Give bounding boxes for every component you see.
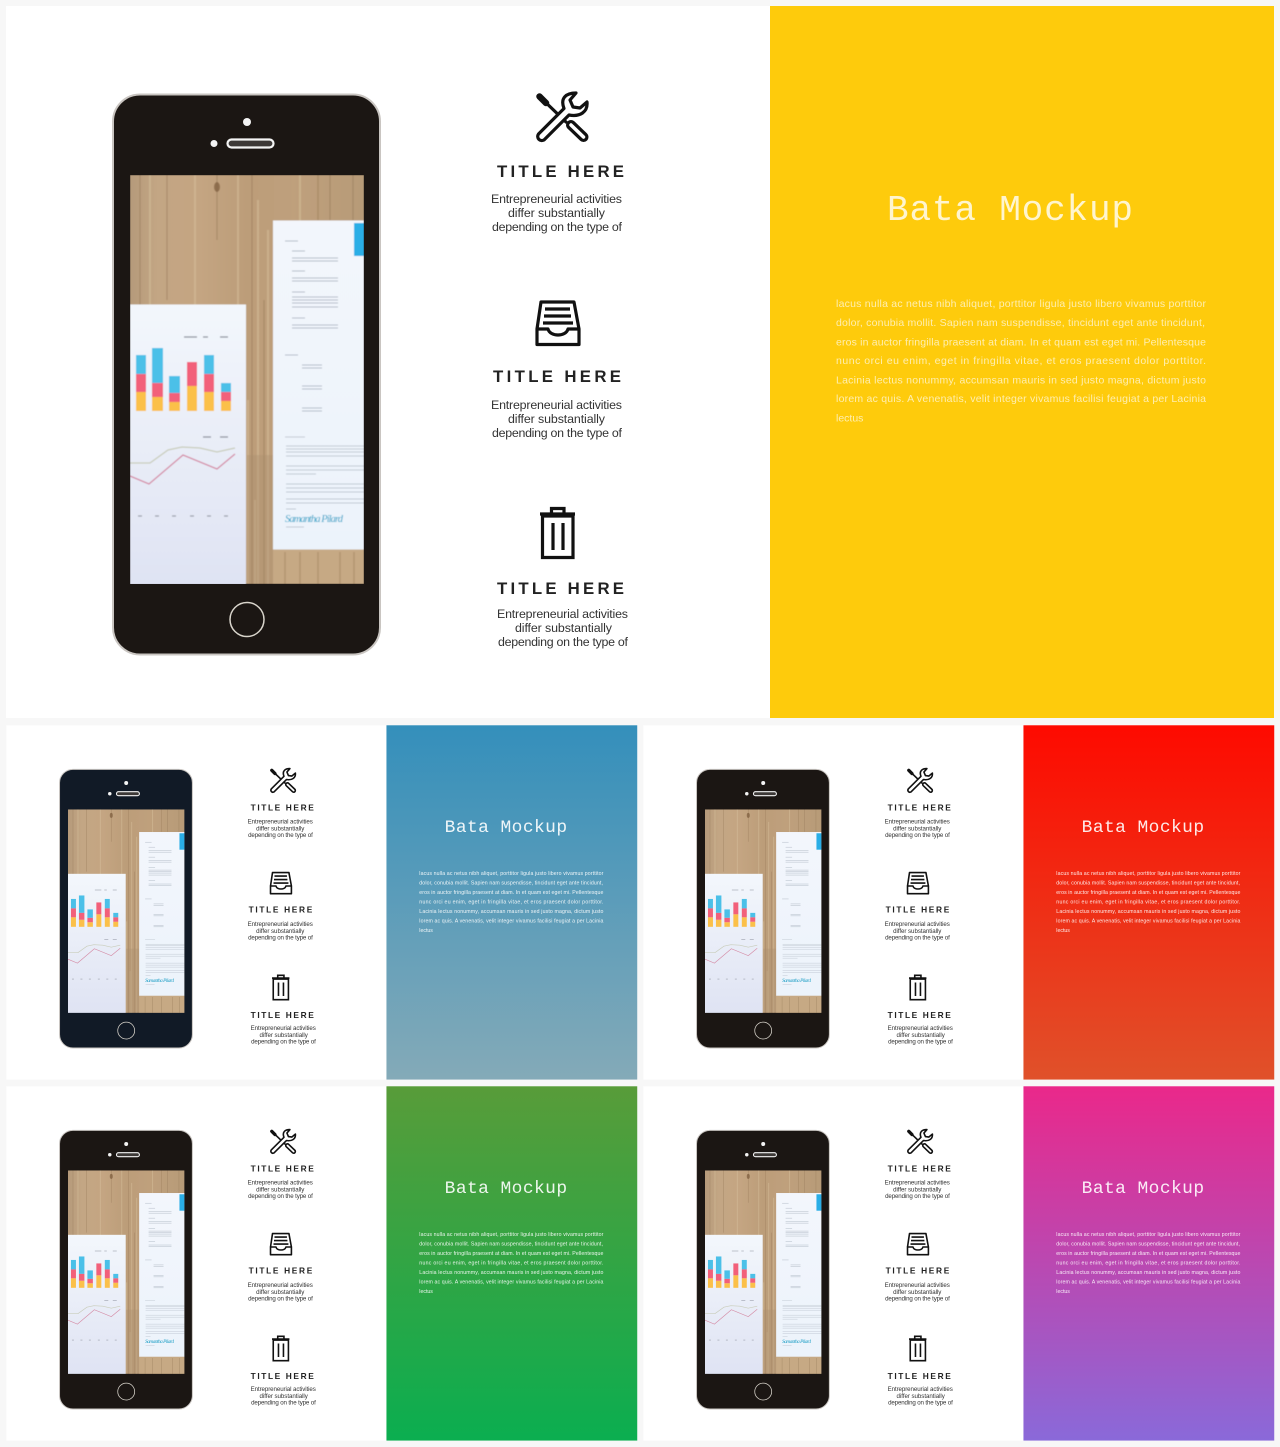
slide: pink mockup (643, 1086, 1274, 1441)
feature text 3: Entrepreneurial activities (888, 1025, 953, 1032)
feature text 3: differ substantially (897, 1393, 946, 1400)
panel body text: eros in auctor fringilla praesent at diam. In et quam est eget mi. Pellentesque (419, 1251, 603, 1257)
icon: tray (537, 302, 579, 344)
panel body text: lectus (1056, 928, 1070, 934)
feature title 3: TITLE HERE (888, 1010, 951, 1020)
feature text 2: Entrepreneurial activities (491, 398, 622, 412)
phone mockup (60, 1130, 192, 1409)
feature text 1: differ substantially (508, 206, 606, 220)
panel heading: Bata Mockup (445, 1179, 567, 1199)
panel body text: lorem ac quis. A venenatis, velit integer vivamus facilisi feugiat a per Lacinia (1056, 918, 1240, 924)
feature text 2: depending on the type of (248, 1296, 313, 1303)
feature title 1: TITLE HERE (888, 1163, 951, 1173)
feature text 2: differ substantially (508, 412, 606, 426)
feature text 1: differ substantially (893, 1186, 942, 1193)
panel body text: lectus (419, 1289, 433, 1295)
feature title 2: TITLE HERE (249, 1265, 313, 1275)
panel body text: Lacinia lectus nonummy, accumsan mauris in sed justo magna, dictum justo (1056, 909, 1240, 915)
icon: tray (271, 873, 291, 894)
icon: tray (908, 1234, 928, 1255)
feature text 2: differ substantially (893, 1289, 942, 1296)
feature text 2: differ substantially (256, 1289, 305, 1296)
feature text 3: differ substantially (260, 1393, 309, 1400)
panel body text: nunc orci eu enim, eget in fringilla vitae, et eros praesent dolor porttitor. (1056, 1260, 1240, 1266)
icon: tools (908, 1130, 932, 1153)
feature text 1: depending on the type of (248, 1193, 313, 1200)
phone mockup (697, 769, 829, 1048)
feature text 2: depending on the type of (885, 935, 950, 942)
panel body text: dolor, conubia mollit. Sapien nam suspendisse, tincidunt eget ante tincidunt, (836, 317, 1205, 329)
feature title 3: TITLE HERE (888, 1371, 951, 1381)
feature text 1: depending on the type of (492, 220, 623, 234)
feature text 1: depending on the type of (885, 1193, 950, 1200)
panel body text: eros in auctor fringilla praesent at diam. In et quam est eget mi. Pellentesque (419, 890, 603, 896)
panel body text: nunc orci eu enim, eget in fringilla vitae, et eros praesent dolor porttitor. (1056, 899, 1240, 905)
panel body text: nunc orci eu enim, eget in fringilla vitae, et eros praesent dolor porttitor. (419, 1260, 603, 1266)
slide background (6, 725, 637, 1080)
panel body text: dolor, conubia mollit. Sapien nam suspendisse, tincidunt eget ante tincidunt, (1056, 1242, 1240, 1248)
feature title 1: TITLE HERE (251, 1163, 314, 1173)
feature text 1: differ substantially (256, 825, 305, 832)
colour panel (386, 725, 637, 1080)
panel body text: lacus nulla ac netus nibh aliquet, porttitor ligula justo libero vivamus porttitor (419, 1232, 604, 1238)
feature title 2: TITLE HERE (886, 1265, 950, 1275)
slide background (6, 6, 1274, 718)
feature text 1: Entrepreneurial activities (248, 818, 313, 825)
feature text 3: depending on the type of (888, 1400, 953, 1407)
feature text 1: differ substantially (256, 1186, 305, 1193)
panel body text: lectus (419, 928, 433, 934)
feature text 1: differ substantially (893, 825, 942, 832)
panel body text: Lacinia lectus nonummy, accumsan mauris in sed justo magna, dictum justo (419, 1270, 603, 1276)
colour panel (1023, 725, 1274, 1080)
icon: tray (271, 1234, 291, 1255)
feature title 3: TITLE HERE (251, 1371, 314, 1381)
feature text 3: depending on the type of (251, 1039, 316, 1046)
feature text 3: Entrepreneurial activities (497, 607, 628, 621)
feature text 2: differ substantially (893, 928, 942, 935)
feature text 1: depending on the type of (248, 832, 313, 839)
icon: trash (909, 1336, 926, 1361)
feature text 2: differ substantially (256, 928, 305, 935)
panel heading: Bata Mockup (445, 818, 567, 838)
panel body text: lorem ac quis. A venenatis, velit integer vivamus facilisi feugiat a per Lacinia (836, 393, 1206, 405)
panel body text: Lacinia lectus nonummy, accumsan mauris in sed justo magna, dictum justo (1056, 1270, 1240, 1276)
feature text 1: Entrepreneurial activities (248, 1179, 313, 1186)
slide background (643, 725, 1274, 1080)
feature text 3: differ substantially (515, 621, 613, 635)
panel body text: lectus (836, 412, 863, 424)
icon: tray (908, 873, 928, 894)
panel body text: lacus nulla ac netus nibh aliquet, porttitor ligula justo libero vivamus porttitor (1056, 1232, 1241, 1238)
feature text 3: Entrepreneurial activities (251, 1386, 316, 1393)
panel body text: nunc orci eu enim, eget in fringilla vitae, et eros praesent dolor porttitor. (836, 355, 1206, 367)
colour panel (1023, 1086, 1274, 1441)
feature text 2: Entrepreneurial activities (248, 921, 313, 928)
panel body text: lacus nulla ac netus nibh aliquet, porttitor ligula justo libero vivamus porttitor (1056, 871, 1241, 877)
icon: tools (908, 769, 932, 792)
panel body text: dolor, conubia mollit. Sapien nam suspendisse, tincidunt eget ante tincidunt, (1056, 881, 1240, 887)
panel heading: Bata Mockup (887, 190, 1133, 231)
feature text 2: Entrepreneurial activities (885, 1282, 950, 1289)
feature title 2: TITLE HERE (886, 904, 950, 914)
feature text 1: Entrepreneurial activities (885, 1179, 950, 1186)
feature title 1: TITLE HERE (251, 802, 314, 812)
feature text 2: Entrepreneurial activities (248, 1282, 313, 1289)
panel body text: lorem ac quis. A venenatis, velit integer vivamus facilisi feugiat a per Lacinia (419, 1279, 603, 1285)
feature text 3: Entrepreneurial activities (251, 1025, 316, 1032)
feature text 2: depending on the type of (885, 1296, 950, 1303)
panel body text: Lacinia lectus nonummy, accumsan mauris in sed justo magna, dictum justo (419, 909, 603, 915)
panel body text: lorem ac quis. A venenatis, velit integer vivamus facilisi feugiat a per Lacinia (419, 918, 603, 924)
panel body text: dolor, conubia mollit. Sapien nam suspendisse, tincidunt eget ante tincidunt, (419, 1242, 603, 1248)
slide: blue mockup (6, 725, 637, 1080)
feature text 3: depending on the type of (498, 635, 629, 649)
slide background (6, 1086, 637, 1441)
icon: trash (272, 975, 289, 1000)
panel body text: Lacinia lectus nonummy, accumsan mauris in sed justo magna, dictum justo (836, 374, 1206, 386)
feature title 3: TITLE HERE (251, 1010, 314, 1020)
feature title 1: TITLE HERE (497, 162, 624, 181)
feature text 3: differ substantially (897, 1032, 946, 1039)
icon: tools (271, 769, 295, 792)
feature text 1: Entrepreneurial activities (491, 192, 622, 206)
panel body text: lacus nulla ac netus nibh aliquet, porttitor ligula justo libero vivamus porttitor (419, 871, 604, 877)
feature text 2: Entrepreneurial activities (885, 921, 950, 928)
feature text 3: depending on the type of (888, 1039, 953, 1046)
panel heading: Bata Mockup (1082, 818, 1204, 838)
feature text 2: depending on the type of (248, 935, 313, 942)
feature text 3: depending on the type of (251, 1400, 316, 1407)
phone mockup (113, 94, 380, 654)
panel body text: eros in auctor fringilla praesent at diam. In et quam est eget mi. Pellentesque (836, 336, 1206, 348)
feature text 2: depending on the type of (492, 426, 623, 440)
feature title 3: TITLE HERE (497, 579, 624, 598)
panel body text: eros in auctor fringilla praesent at diam. In et quam est eget mi. Pellentesque (1056, 890, 1240, 896)
slide: red mockup (643, 725, 1274, 1080)
feature text 1: Entrepreneurial activities (885, 818, 950, 825)
slide: large yellow mockup (6, 6, 1274, 718)
icon: tools (538, 93, 587, 141)
feature title 2: TITLE HERE (493, 367, 621, 386)
icon: trash (272, 1336, 289, 1361)
phone mockup (697, 1130, 829, 1409)
slide: green mockup (6, 1086, 637, 1441)
icon: trash (540, 508, 575, 558)
feature title 2: TITLE HERE (249, 904, 313, 914)
colour panel (770, 6, 1274, 718)
feature text 1: depending on the type of (885, 832, 950, 839)
icon: trash (909, 975, 926, 1000)
feature text 3: differ substantially (260, 1032, 309, 1039)
panel body text: lacus nulla ac netus nibh aliquet, porttitor ligula justo libero vivamus porttitor (836, 298, 1206, 310)
panel body text: eros in auctor fringilla praesent at diam. In et quam est eget mi. Pellentesque (1056, 1251, 1240, 1257)
phone mockup (60, 769, 192, 1048)
colour panel (386, 1086, 637, 1441)
panel body text: lorem ac quis. A venenatis, velit integer vivamus facilisi feugiat a per Lacinia (1056, 1279, 1240, 1285)
icon: tools (271, 1130, 295, 1153)
panel body text: lectus (1056, 1289, 1070, 1295)
panel body text: dolor, conubia mollit. Sapien nam suspendisse, tincidunt eget ante tincidunt, (419, 881, 603, 887)
slide background (643, 1086, 1274, 1441)
feature title 1: TITLE HERE (888, 802, 951, 812)
panel body text: nunc orci eu enim, eget in fringilla vitae, et eros praesent dolor porttitor. (419, 899, 603, 905)
panel heading: Bata Mockup (1082, 1179, 1204, 1199)
feature text 3: Entrepreneurial activities (888, 1386, 953, 1393)
